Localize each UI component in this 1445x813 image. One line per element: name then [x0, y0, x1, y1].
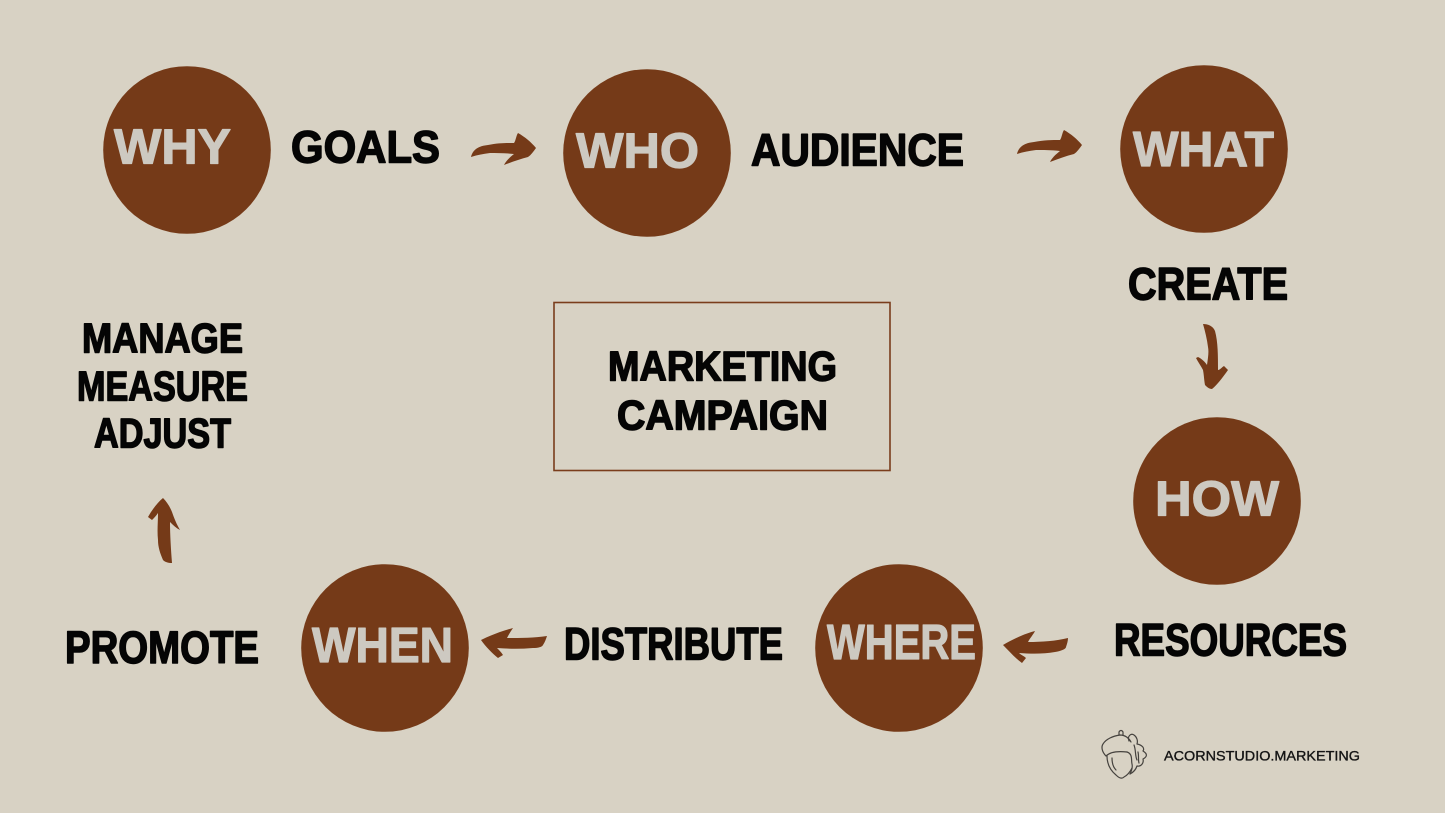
label: DISTRIBUTE: DISTRIBUTE — [564, 618, 783, 670]
label: MANAGE MEASURE ADJUST — [77, 314, 248, 456]
circle: WHERE — [815, 564, 983, 732]
circle: WHEN: WHEN — [312, 619, 453, 673]
arrow: distribute to when — [481, 628, 547, 658]
circle: WHO: WHO — [576, 124, 699, 178]
circle: WHY: WHY — [114, 120, 231, 174]
label: AUDIENCE: AUDIENCE — [751, 124, 964, 176]
circle: WHAT — [1120, 65, 1288, 233]
circle: WHY — [103, 66, 271, 234]
arrow: create to how — [1196, 324, 1228, 389]
label: PROMOTE: PROMOTE — [65, 622, 259, 673]
circle: WHAT: WHAT — [1133, 123, 1274, 177]
circle: HOW — [1133, 417, 1301, 585]
panel: central title box: CAMPAIGN — [617, 392, 828, 438]
arrow: audience to what — [1017, 130, 1082, 162]
panel: central title box: MARKETING — [608, 342, 837, 390]
arrow: goals to who — [471, 133, 536, 165]
circle: WHO — [563, 69, 731, 237]
label: MANAGE MEASURE ADJUST: MEASURE — [77, 362, 248, 410]
label: CREATE: CREATE — [1128, 258, 1288, 310]
circle: WHERE: WHERE — [827, 616, 976, 670]
label: MANAGE MEASURE ADJUST: ADJUST — [94, 410, 231, 456]
panel: central title box — [554, 302, 890, 470]
circle: HOW: HOW — [1155, 472, 1280, 526]
label: MANAGE MEASURE ADJUST: MANAGE — [82, 314, 243, 362]
arrow: promote to manage — [148, 498, 180, 563]
label: website: ACORNSTUDIO.MARKETING — [1164, 748, 1360, 764]
circle: WHEN — [301, 564, 469, 732]
label: GOALS: GOALS — [291, 122, 440, 172]
icon: acorn logo — [1102, 730, 1146, 778]
arrow: resources to where — [1003, 631, 1068, 663]
label: RESOURCES: RESOURCES — [1114, 614, 1347, 666]
